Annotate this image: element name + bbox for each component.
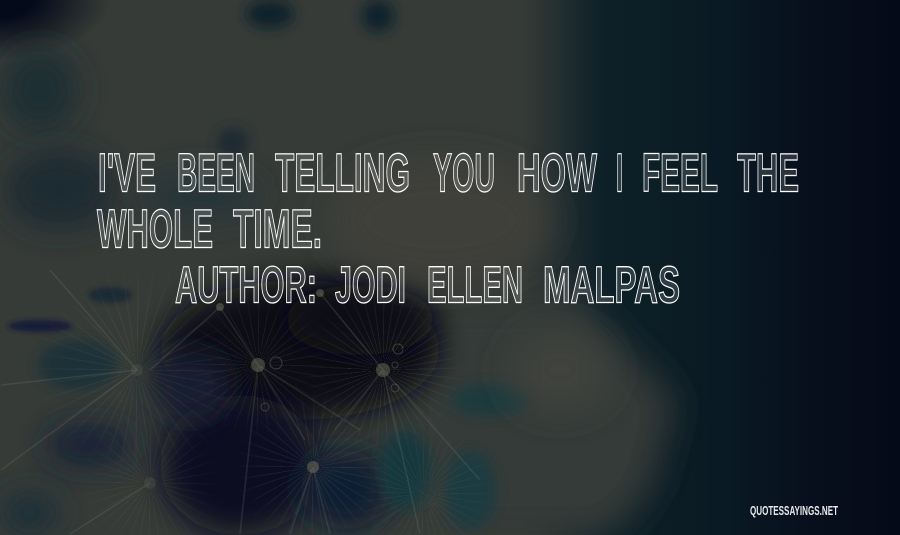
dandelion seed ray cluster: bottom left xyxy=(116,446,194,517)
author line: ELLEN xyxy=(427,256,523,314)
quote line 1: HOW xyxy=(517,142,597,204)
quote line 1: THE xyxy=(737,142,799,204)
quote line 1: TELLING xyxy=(275,142,410,204)
quote line 1: I xyxy=(616,142,623,204)
watermark: QUOTESSAYINGS.NET xyxy=(750,503,838,518)
quote line 1: YOU xyxy=(433,142,495,204)
quote line 1: FEEL xyxy=(642,142,718,204)
quote line 2: WHOLE xyxy=(97,198,213,260)
author line: JODI xyxy=(335,256,406,314)
author line: MALPAS xyxy=(543,256,680,314)
author line xyxy=(175,256,680,314)
quote line 2: TIME. xyxy=(233,198,322,260)
quote line 1: BEEN xyxy=(177,142,255,204)
quote line 1: I'VE xyxy=(98,142,156,204)
author line: AUTHOR: xyxy=(175,256,317,314)
dandelion seed ray cluster: centre xyxy=(204,310,312,420)
dandelion stems and seed heads xyxy=(1,270,480,534)
dandelion seed ray cluster: bottom middle xyxy=(256,412,366,520)
quote text xyxy=(97,142,799,260)
dandelion seed ray cluster: left xyxy=(80,320,198,422)
dandelion seed ray cluster: right xyxy=(318,305,444,428)
quote line 1 xyxy=(98,142,799,204)
dandelion seed ray cluster: bottom right xyxy=(384,455,461,526)
